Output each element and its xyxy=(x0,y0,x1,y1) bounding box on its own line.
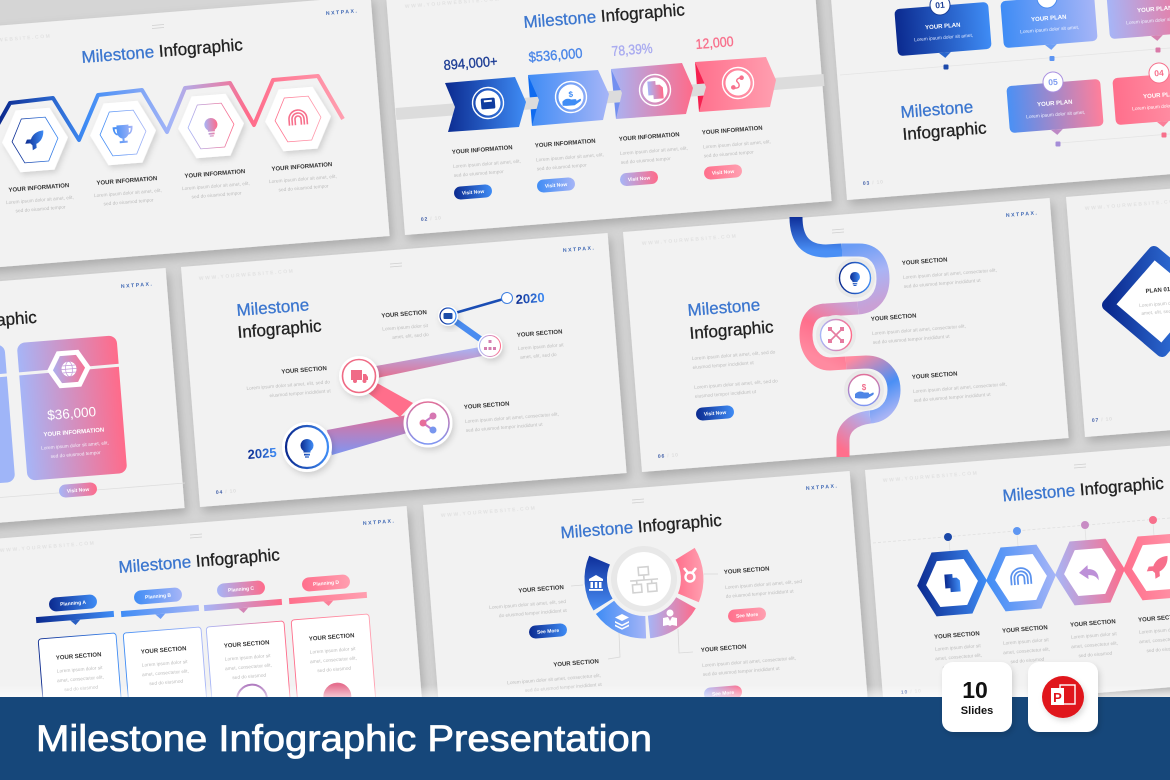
section text 1: Lorem ipsum dolor sit amet, consectetur elit, xyxy=(903,268,997,281)
icon badge 3 xyxy=(638,73,672,107)
button see more right xyxy=(728,607,766,623)
planning C column: Lorem ipsum dolor sit xyxy=(225,653,271,663)
slide 7 background xyxy=(1066,163,1170,437)
button see more lower xyxy=(704,685,742,701)
slide 2 text column 2: Lorem ipsum dolor sit amet, elit, xyxy=(536,152,604,163)
slide 10 text column 3: sed do eiusmod xyxy=(1078,651,1113,659)
node money hand xyxy=(844,370,884,410)
hexagon 4 rocket xyxy=(1121,532,1170,602)
hexagon 2 rainbow xyxy=(984,543,1058,613)
planning D column: YOUR SECTION xyxy=(309,633,355,643)
button 1: Visit Now xyxy=(462,189,485,197)
section text upper right xyxy=(724,564,803,600)
number badge 04 xyxy=(1148,62,1170,84)
section text upper right: Lorem ipsum dolor sit amet, elit, sed xyxy=(725,579,802,591)
slide 4 page number: 04 / 10 xyxy=(216,488,237,496)
button 3: Visit Now xyxy=(628,175,651,183)
slide 3 divider line xyxy=(840,48,1170,143)
section text lower right: Lorem ipsum dolor sit amet, consectetur elit, xyxy=(465,412,559,425)
left card fragment xyxy=(0,344,15,490)
planning C column xyxy=(204,580,292,727)
planning B column xyxy=(121,587,209,733)
slide 8 background xyxy=(0,506,426,780)
panel: slide 6 revenue cards xyxy=(0,268,185,542)
planning D column: amet, consectetur elit, xyxy=(310,656,357,665)
connector lines xyxy=(571,574,718,659)
slide 2 page number: 02 / 10 xyxy=(421,215,442,223)
slide 9 handle xyxy=(632,499,644,503)
stat $536,000: $536,000 xyxy=(528,45,583,65)
section text lower right: sed do eiusmod tempor incididunt ut xyxy=(466,422,543,434)
arrow block 4 xyxy=(695,57,776,112)
arrow block 3 xyxy=(611,63,693,119)
slide 3 page number: 03 / 10 xyxy=(863,179,884,187)
label 2020: 2020 xyxy=(515,290,545,307)
slide 1 text column 4 xyxy=(268,162,338,194)
stat 894,000+: 894,000+ xyxy=(443,53,498,73)
slide 1 text column 4: YOUR INFORMATION xyxy=(271,162,333,173)
slide 1 text column 1 xyxy=(5,183,75,215)
section text top right: YOUR SECTION xyxy=(517,329,563,339)
planning A column: sed do eiusmod xyxy=(64,684,99,693)
planning D column: sed do eiusmod xyxy=(317,665,352,674)
panel: slide 4 route timeline xyxy=(181,233,627,507)
slide 2 text column 3: Lorem ipsum dolor sit amet, elit, xyxy=(620,146,688,157)
section text 3: sed do eiusmod tempor incididunt ut xyxy=(914,392,991,404)
slide 9 brand: NXTPAX. xyxy=(806,483,839,492)
section text top right: Lorem ipsum dolor sit xyxy=(518,342,565,352)
section text middle left xyxy=(245,366,332,401)
stat 78,39%: 78,39% xyxy=(611,40,653,59)
slide 5 intro text: eiusmod tempor incididunt ut xyxy=(692,360,755,371)
arrow fold shades xyxy=(528,62,708,126)
slide 4 handle xyxy=(390,263,402,267)
section text bottom: YOUR SECTION xyxy=(553,659,599,669)
panel: slide 3 plan cards xyxy=(828,0,1170,200)
section text top left xyxy=(381,310,430,342)
marker dots xyxy=(944,48,1166,146)
number badge 05: 05 xyxy=(1048,77,1058,87)
slide 5 intro text: Lorem ipsum dolor sit amet, elit, sed do xyxy=(694,378,778,391)
planning B column: Planning B xyxy=(145,593,172,601)
hexagon 1 files xyxy=(915,548,989,618)
slide 2 background xyxy=(386,0,832,235)
panel: slide 2 arrow statistics xyxy=(386,0,832,235)
slide 1 text column 1: sed do eiusmod tempor xyxy=(15,204,66,214)
diamond frame xyxy=(1108,252,1170,351)
section text 3: YOUR SECTION xyxy=(912,371,958,381)
node truck icon xyxy=(339,356,379,396)
planning D column: Planning D xyxy=(313,580,340,588)
slide 10 text column 3: YOUR SECTION xyxy=(1070,619,1116,629)
slide 4 website: WWW.YOURWEBSITE.COM xyxy=(199,268,295,282)
slide 10 background xyxy=(865,436,1170,710)
number badge 05 xyxy=(1042,71,1064,93)
slide 5 page number: 06 / 10 xyxy=(658,452,679,460)
planning A column: Planning A xyxy=(60,600,87,608)
dashed timeline with pins xyxy=(873,516,1170,552)
badge: 10 slides: Slides xyxy=(961,705,993,717)
button visit now xyxy=(696,405,734,421)
node hierarchy icon xyxy=(478,334,502,358)
number badge 01 xyxy=(929,0,951,16)
slide 1 text column 2: YOUR INFORMATION xyxy=(96,176,158,187)
section text lower right: Lorem ipsum dolor sit amet, consectetur elit, xyxy=(702,655,796,669)
arrow block 1 xyxy=(445,77,526,132)
section text bottom: sed do eiusmod tempor incididunt ut xyxy=(525,682,603,694)
button 4 xyxy=(704,164,742,180)
section text top right xyxy=(517,329,565,361)
slide 2 text column 2 xyxy=(535,138,605,172)
number badge 04: 04 xyxy=(1154,68,1164,78)
donut segment navy xyxy=(584,556,613,610)
section text left xyxy=(488,585,568,620)
hexagon 2 with trophy xyxy=(88,99,158,167)
plan card 05 xyxy=(1006,79,1104,139)
slide 2 text column 4: Lorem ipsum dolor sit amet, elit, xyxy=(703,139,771,150)
slide 1 text column 2 xyxy=(93,176,163,208)
icon bank xyxy=(589,575,603,591)
slide 8 handle xyxy=(190,534,202,538)
plan card 02: Lorem ipsum dolor sit amet, xyxy=(1020,25,1079,35)
number badge 02 xyxy=(1036,0,1058,9)
icon map person xyxy=(663,610,677,626)
slide 10 text column 2: Lorem ipsum dolor sit xyxy=(1003,637,1050,647)
slide 10 text column 2: sed do eiusmod xyxy=(1010,657,1045,665)
zigzag milestone line xyxy=(0,76,343,140)
slide 10 page number: 10 / 10 xyxy=(901,688,922,696)
button 2: Visit Now xyxy=(545,182,568,190)
planning C column: sed do eiusmod xyxy=(232,672,267,681)
winding path xyxy=(796,217,894,457)
section text 1: sed do eiusmod tempor incididunt ut xyxy=(904,278,981,290)
slide 5 intro text xyxy=(692,349,779,400)
slide 10 text column 1: YOUR SECTION xyxy=(934,631,980,641)
slide 2 text column 4: YOUR INFORMATION xyxy=(702,126,763,136)
section text 3: Lorem ipsum dolor sit amet, consectetur elit, xyxy=(913,382,1007,395)
slide 2 text column 3: sed do eiusmod tempor xyxy=(621,156,671,166)
button 4: Visit Now xyxy=(712,169,735,177)
slide 1 text column 4: Lorem ipsum dolor sit amet, elit, xyxy=(269,174,337,185)
stat 12,000: 12,000 xyxy=(695,33,734,52)
button see more left xyxy=(529,623,567,639)
slide 10 text column 1: sed do eiusmod xyxy=(942,663,977,671)
section text lower right: YOUR SECTION xyxy=(701,644,747,654)
plan card 01: YOUR PLAN xyxy=(925,23,961,31)
planning C column: amet, consectetur elit, xyxy=(225,663,272,672)
slide 10 text column 1: Lorem ipsum dolor sit xyxy=(935,643,982,653)
hexagon 1 with rocket xyxy=(0,106,70,174)
icon badge 1 xyxy=(471,86,505,120)
slide 1 text column 3: YOUR INFORMATION xyxy=(184,169,246,180)
slide 3 title xyxy=(900,97,988,144)
card text: Lorem ipsum dolor sit amet, elit, xyxy=(41,440,109,452)
hexagon globe icon xyxy=(49,352,89,386)
panel: slide 5 winding path xyxy=(623,198,1069,472)
section text bottom xyxy=(506,659,603,695)
planning B column: Lorem ipsum dolor sit xyxy=(142,659,188,669)
slide 10 text column 1: amet, consectetur elit, xyxy=(935,653,982,662)
bottom rule xyxy=(0,483,185,498)
planning D column: Lorem ipsum dolor sit xyxy=(310,646,356,656)
section text upper right: do eiusmod tempor incididunt ut xyxy=(726,588,795,600)
icon medal xyxy=(684,568,696,582)
plan card 03 xyxy=(1106,0,1170,45)
node share icon xyxy=(404,398,452,448)
timeline bar xyxy=(396,80,824,114)
donut segment pink xyxy=(676,548,703,602)
card text xyxy=(40,427,110,461)
slide 2 title: Milestone Infographic xyxy=(523,0,686,32)
planning C column: Planning C xyxy=(228,586,255,594)
node money hand: $ xyxy=(862,383,867,392)
slide 5 handle xyxy=(832,229,844,233)
plan card 05: YOUR PLAN xyxy=(1037,100,1073,108)
plan card 01: Lorem ipsum dolor sit amet, xyxy=(914,33,973,43)
node bulb xyxy=(835,258,875,298)
slide 2 text column 4: sed do eiusmod tempor xyxy=(704,149,754,159)
slide 1 text column 1: YOUR INFORMATION xyxy=(8,183,70,194)
slide 10 title: Milestone Infographic xyxy=(1002,474,1165,505)
button see more lower: See More xyxy=(712,690,735,698)
panel: slide 8 planning columns xyxy=(0,506,426,780)
plan card 01 xyxy=(894,2,992,62)
slide 7 page number: 07 / 10 xyxy=(1092,416,1113,424)
slide 2 text column 4 xyxy=(702,125,772,159)
section text left: do eiusmod tempor incididunt ut xyxy=(499,608,568,619)
section text upper right: YOUR SECTION xyxy=(724,566,770,576)
gradient info card xyxy=(17,335,127,481)
button visit now: Visit Now xyxy=(67,487,90,495)
plan card 04 xyxy=(1112,71,1170,131)
slide 10 website: WWW.YOURWEBSITE.COM xyxy=(883,470,979,484)
slide 5 background xyxy=(623,198,1069,472)
plan card 02 xyxy=(1000,0,1098,54)
button 3 xyxy=(620,171,658,186)
node chat icon xyxy=(438,306,458,326)
slide 2 text column 2: sed do eiusmod tempor xyxy=(537,162,587,172)
slide 4 title xyxy=(236,295,323,342)
button 1 xyxy=(454,184,492,200)
card text: sed do eiusmod tempor xyxy=(50,450,101,460)
banner fade xyxy=(0,685,1170,697)
planning A column xyxy=(36,594,124,739)
panel: slide 9 donut xyxy=(423,471,869,745)
hexagon 3 reply arrows xyxy=(1053,537,1127,607)
slide 2 text column 3: YOUR INFORMATION xyxy=(619,132,680,143)
panel: slide 1 hexagon milestones xyxy=(0,0,390,270)
start node 2020 xyxy=(502,292,512,304)
section text lower right xyxy=(701,641,797,678)
slide 1 brand: NXTPAX. xyxy=(326,8,359,17)
slide 2 text column 1: Lorem ipsum dolor sit amet, elit, xyxy=(453,159,521,170)
slide 10 text column 2: YOUR SECTION xyxy=(1002,625,1048,635)
section text lower right xyxy=(464,398,560,434)
section text 1 xyxy=(902,254,998,290)
button see more left: See More xyxy=(537,628,560,636)
panel: slide 10 hexagon chain xyxy=(865,436,1170,710)
slide 1 background xyxy=(0,0,390,270)
slide 8 title: Milestone Infographic xyxy=(118,545,281,577)
planning D column xyxy=(289,574,377,720)
slide 5 website: WWW.YOURWEBSITE.COM xyxy=(642,233,738,247)
badge: 10 slides xyxy=(942,662,1012,732)
slide 6 brand: NXTPAX. xyxy=(121,281,154,290)
slide 1 text column 1: Lorem ipsum dolor sit amet, elit, xyxy=(6,195,74,206)
section text 3 xyxy=(912,368,1008,404)
icon layers xyxy=(615,614,629,630)
slide 10 text column 3: Lorem ipsum dolor sit xyxy=(1071,631,1118,641)
slide 1 title: Milestone Infographic xyxy=(81,35,244,67)
donut segment blue xyxy=(596,601,646,638)
icon badge 2: $ xyxy=(568,90,574,99)
planning A column: YOUR SECTION xyxy=(56,652,102,662)
slide 2 text column 1: YOUR INFORMATION xyxy=(452,145,513,156)
icon badge 2 xyxy=(554,80,588,114)
slide 5 intro text: eiusmod tempor incididunt ut xyxy=(695,389,757,400)
section text lower right: YOUR SECTION xyxy=(464,401,510,411)
badge: PowerPoint xyxy=(1028,662,1098,732)
node bulb icon xyxy=(282,422,332,472)
slide 1 text column 4: sed do eiusmod tempor xyxy=(278,183,329,193)
stat $36,000: $36,000 xyxy=(47,404,97,423)
donut center network icon xyxy=(608,543,680,615)
hexagon 4 with rainbow xyxy=(263,85,333,153)
slide 1 text column 3: Lorem ipsum dolor sit amet, elit, xyxy=(182,181,250,192)
badge: PowerPoint: P xyxy=(1053,690,1062,705)
slide 5 title: Infographic xyxy=(689,317,775,343)
button see more right: See More xyxy=(736,612,759,620)
button visit now: Visit Now xyxy=(704,410,727,418)
slide 10 text column 3 xyxy=(1069,619,1119,660)
node arrows xyxy=(816,315,856,355)
slide 5 title xyxy=(687,295,775,343)
slide 9 title: Milestone Infographic xyxy=(560,511,723,542)
slide 2 text column 2: YOUR INFORMATION xyxy=(535,139,596,149)
section text top right: amet, elit, sed do xyxy=(520,352,557,361)
section text top left: Lorem ipsum dolor sit xyxy=(382,323,429,333)
button 2 xyxy=(537,177,575,193)
diamond text: PLAN 01 xyxy=(1145,287,1170,295)
section text lower right: sed do eiusmod tempor incididunt ut xyxy=(703,666,781,678)
section text 2 xyxy=(871,310,967,346)
slide 2 text column 1 xyxy=(452,145,522,179)
slide 1 handle xyxy=(152,24,164,28)
section text 2: sed do eiusmod tempor incididunt ut xyxy=(873,334,950,346)
donut segment purple xyxy=(648,597,696,638)
slide 4 brand: NXTPAX. xyxy=(563,245,596,254)
slide 4 title: Infographic xyxy=(237,316,323,342)
slide 10 text column 3: amet, consectetur elit, xyxy=(1071,641,1118,650)
section text left: YOUR SECTION xyxy=(518,585,564,595)
section text middle left: YOUR SECTION xyxy=(281,366,327,376)
button visit now xyxy=(59,482,97,498)
plan card 05: Lorem ipsum dolor sit amet, xyxy=(1026,110,1085,120)
section text 2: YOUR SECTION xyxy=(871,313,917,323)
slide 5 intro text: Lorem ipsum dolor sit amet, elit, sed do xyxy=(692,349,776,362)
slide 3 title: Milestone xyxy=(900,97,974,122)
slide 10 text column 1 xyxy=(933,631,983,672)
slide 4 title: Milestone xyxy=(236,295,310,320)
slide 3 background xyxy=(828,0,1170,200)
badge: 10 slides: 10 xyxy=(962,677,988,703)
planning A column: amet, consectetur elit, xyxy=(57,675,104,684)
slide 4 background xyxy=(181,233,627,507)
planning C column: YOUR SECTION xyxy=(224,640,270,650)
slide 2 text column 1: sed do eiusmod tempor xyxy=(454,169,504,179)
panel: slide 7 plan diamond xyxy=(1066,163,1170,437)
section text middle left: eiusmod tempor incididunt ut xyxy=(269,388,332,399)
arrow block 2 xyxy=(528,70,609,126)
section text middle left: Lorem ipsum dolor sit amet, elit, sed do xyxy=(246,379,331,392)
slide 2 text column 3 xyxy=(619,132,689,166)
card cross line xyxy=(0,365,122,376)
plan card 02: YOUR PLAN xyxy=(1031,15,1067,23)
section text top left: amet, elit, sed do xyxy=(392,332,429,341)
slide 6 background xyxy=(0,268,185,542)
planning B column: sed do eiusmod xyxy=(149,678,184,687)
icon badge 4 xyxy=(721,66,755,100)
banner xyxy=(0,697,1170,780)
section text bottom: Lorem ipsum dolor sit amet, consectetur elit, xyxy=(507,673,601,686)
slide 10 handle xyxy=(1074,464,1086,468)
hexagon 3 with bulb xyxy=(176,92,246,160)
slide 1 text column 2: sed do eiusmod tempor xyxy=(103,197,154,207)
slide 1 text column 2: Lorem ipsum dolor sit amet, elit, xyxy=(94,188,162,199)
slide 10 text column 2 xyxy=(1001,625,1051,666)
slide 5 brand: NXTPAX. xyxy=(1006,210,1039,219)
diamond text xyxy=(1138,286,1170,317)
route segments xyxy=(327,298,507,455)
section text 1: YOUR SECTION xyxy=(902,257,948,267)
section text 2: Lorem ipsum dolor sit amet, consectetur elit, xyxy=(872,324,966,337)
slide 8 brand: NXTPAX. xyxy=(363,518,396,527)
slide 10 text column 2: amet, consectetur elit, xyxy=(1003,647,1050,656)
section text top left: YOUR SECTION xyxy=(381,310,427,320)
slide 10 text column 4 xyxy=(1137,614,1170,655)
slide 3 title: Infographic xyxy=(902,118,988,144)
slide 1 text column 3 xyxy=(181,169,251,201)
slide 9 website: WWW.YOURWEBSITE.COM xyxy=(441,505,537,519)
planning A column: Lorem ipsum dolor sit xyxy=(57,665,103,675)
label 2025: 2025 xyxy=(247,445,277,462)
planning B column: YOUR SECTION xyxy=(141,646,187,656)
main title: Milestone Infographic Presentation xyxy=(36,718,652,759)
section text left: Lorem ipsum dolor sit amet, elit, sed xyxy=(489,599,567,611)
slide 1 text column 3: sed do eiusmod tempor xyxy=(191,190,242,200)
slide 9 background xyxy=(423,471,869,745)
slide 8 website: WWW.YOURWEBSITE.COM xyxy=(0,540,96,554)
card text: YOUR INFORMATION xyxy=(43,428,105,438)
planning B column: amet, consectetur elit, xyxy=(142,669,189,678)
slide 5 title: Milestone xyxy=(687,295,761,320)
